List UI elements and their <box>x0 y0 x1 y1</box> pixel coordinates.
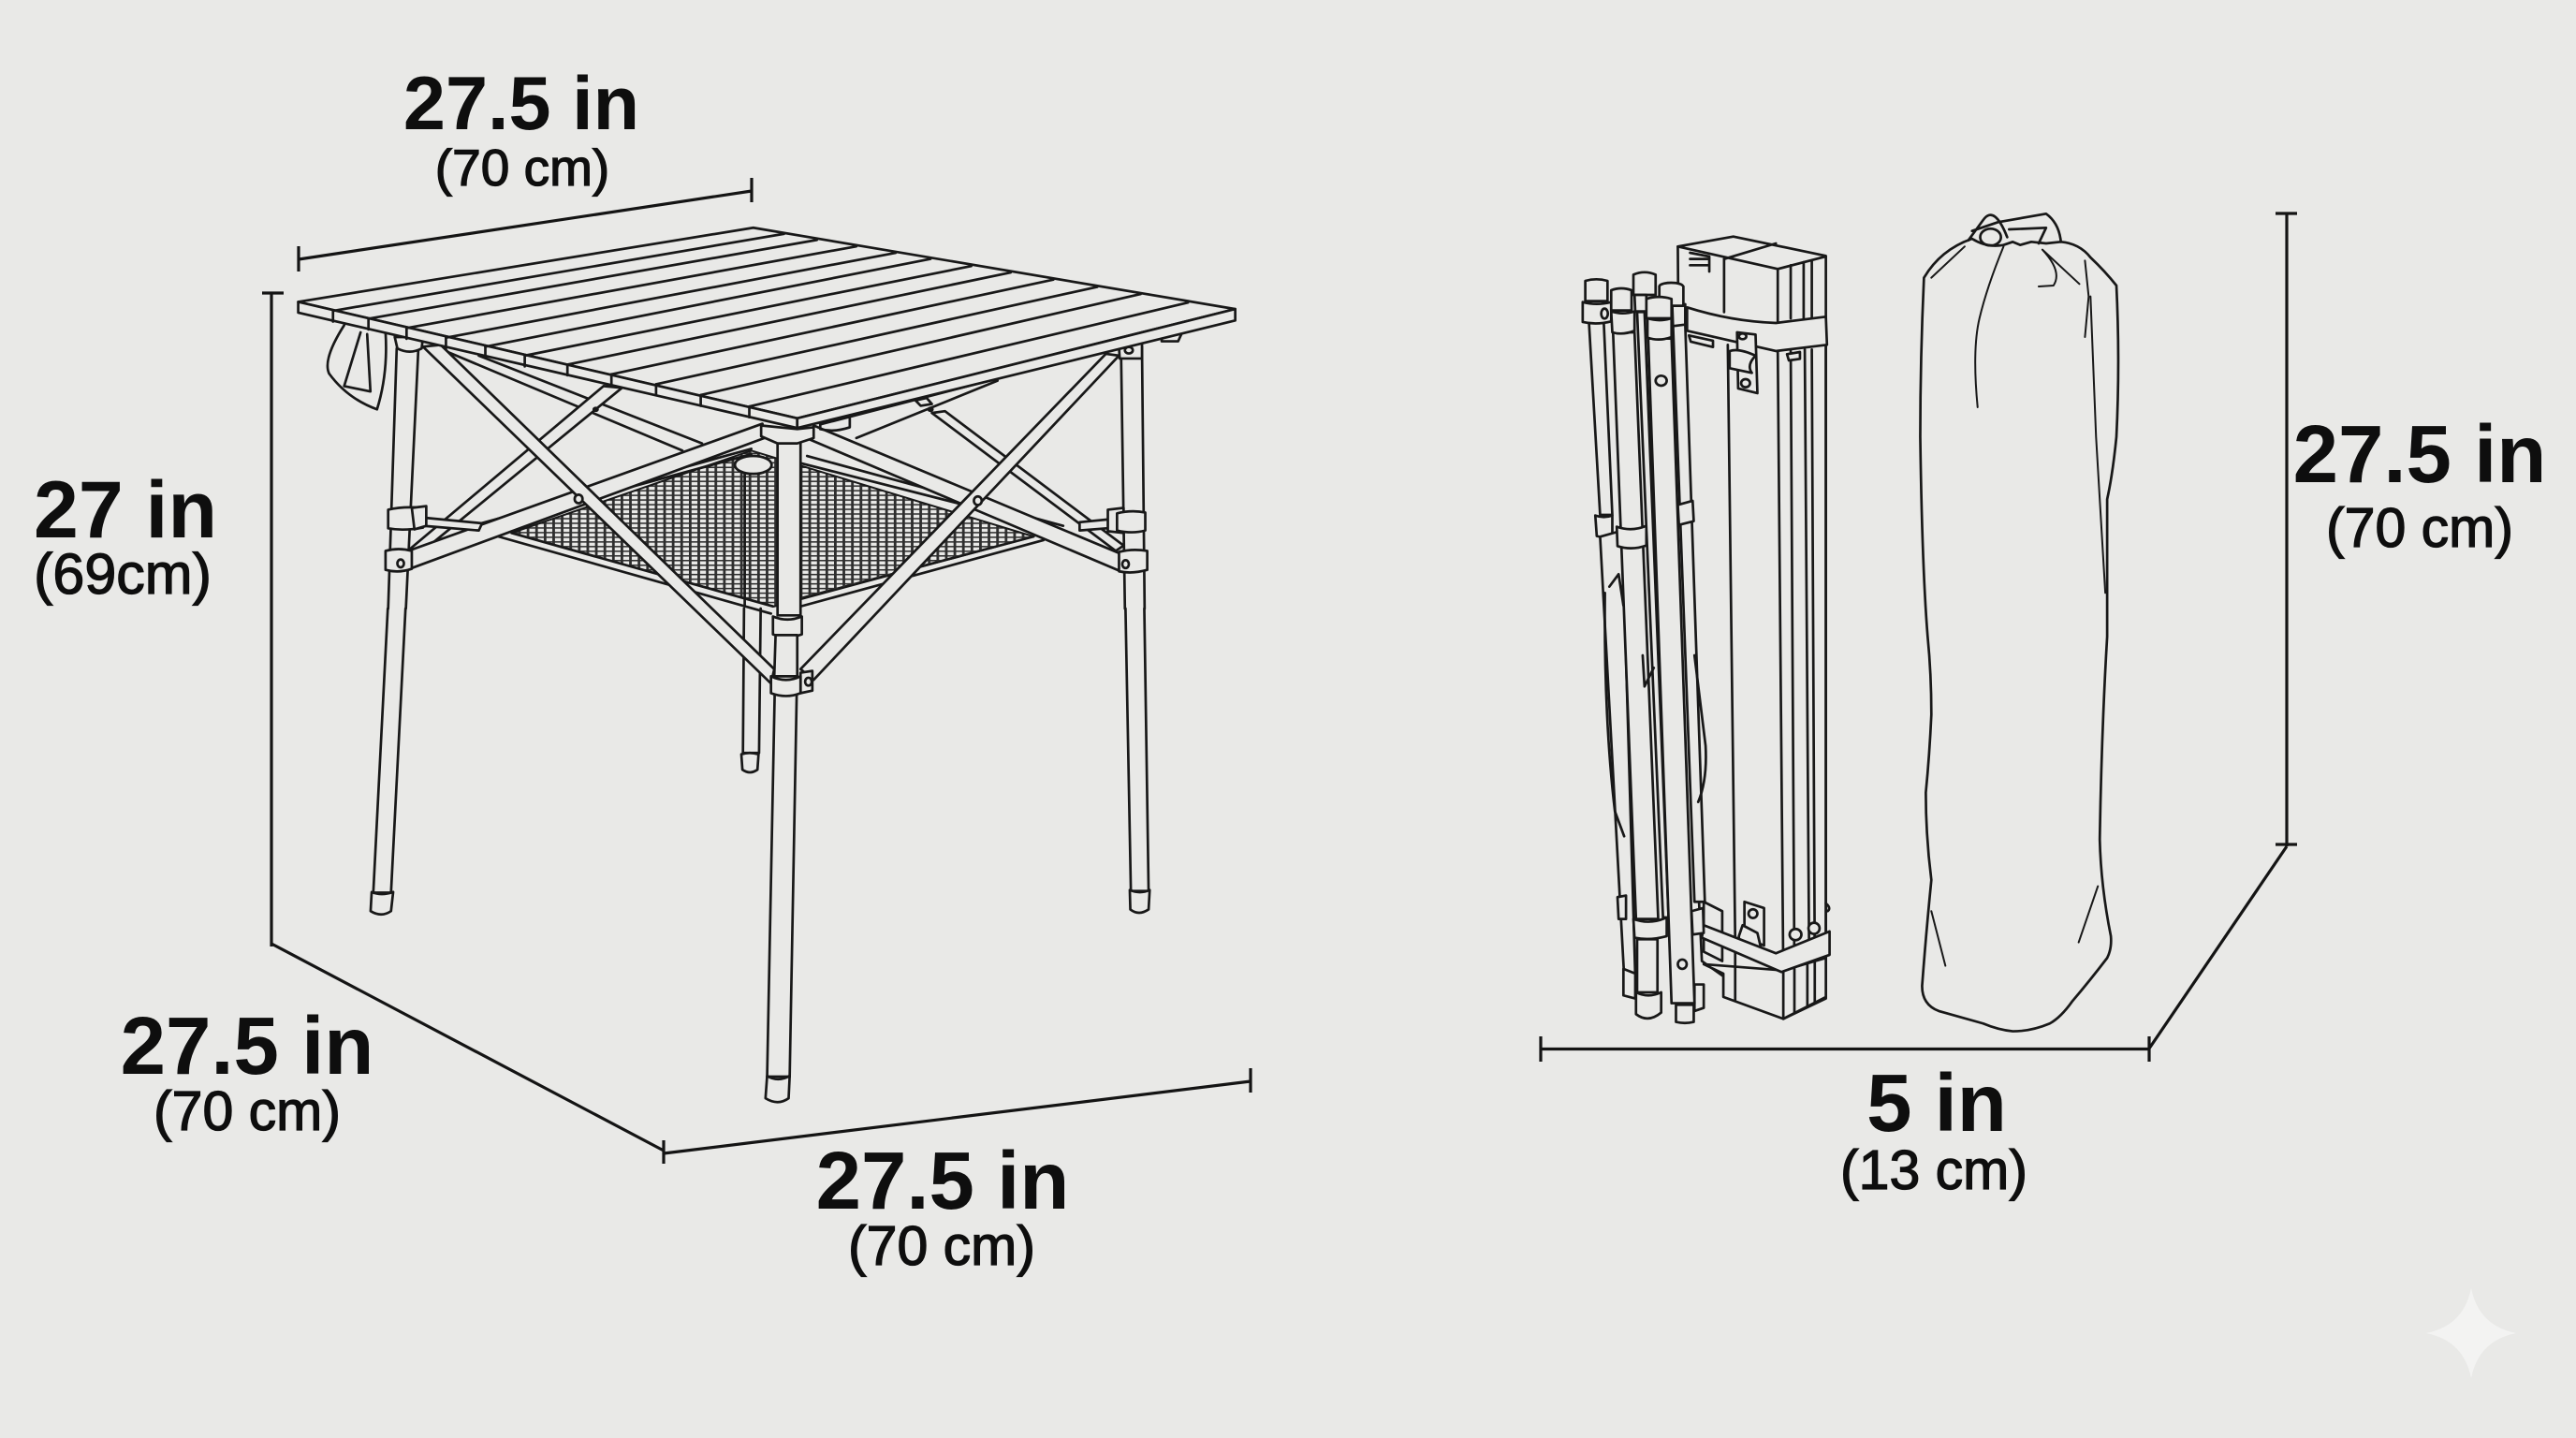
dimension: folded width <box>1541 1036 2149 1062</box>
label: folded height <box>2293 409 2546 559</box>
label: height: 27 in <box>34 465 217 555</box>
front leg upper <box>761 425 813 696</box>
bag drawstring <box>1969 213 2061 245</box>
label: top width <box>403 62 639 197</box>
label: left depth <box>121 1001 373 1142</box>
folded block body <box>1677 237 1826 1019</box>
folded table <box>1583 237 1830 1023</box>
mesh shelf <box>478 448 1063 613</box>
label: folded width: 5 in <box>1866 1058 2007 1149</box>
link arm left <box>423 518 482 531</box>
label: bottom depth: (70 cm) <box>848 1215 1035 1277</box>
under-table tabs <box>820 334 1181 431</box>
dimension: folded height <box>2276 213 2297 846</box>
strap cords <box>1604 574 1705 836</box>
upper band <box>1687 307 1827 351</box>
back leg <box>741 609 761 772</box>
table lower legs <box>371 609 1149 1102</box>
right collars <box>1108 508 1148 572</box>
bag folds <box>1931 246 2105 966</box>
label: folded height: 27.5 in <box>2293 409 2546 500</box>
dimension: top width <box>299 178 752 271</box>
label: folded height: (70 cm) <box>2326 497 2513 559</box>
label: top width: (70 cm) <box>435 139 609 197</box>
pole four <box>1647 297 1694 1023</box>
pivot pins <box>575 494 982 505</box>
label: left depth: 27.5 in <box>121 1001 373 1092</box>
left leg lower <box>371 609 405 915</box>
right leg lower <box>1125 609 1149 913</box>
rear struts <box>410 348 1123 550</box>
sparkle watermark <box>2426 1288 2516 1378</box>
table top <box>299 227 1236 428</box>
label: left depth: (70 cm) <box>154 1080 341 1142</box>
front leg lower <box>766 696 797 1102</box>
strut from front to left collar <box>403 424 765 569</box>
right leg upper <box>1119 343 1145 609</box>
label: height <box>34 465 217 606</box>
bag outline <box>1920 239 2118 1032</box>
link arm right <box>1079 519 1116 531</box>
dimension: depth bottom <box>664 1068 1251 1153</box>
carry bag <box>1920 213 2118 1032</box>
strap loop <box>328 325 386 409</box>
dimension: depth left <box>271 944 664 1164</box>
folding table <box>299 227 1236 696</box>
left collars <box>386 506 426 571</box>
strut from front to right collar <box>811 425 1122 570</box>
label: height: (69cm) <box>34 542 212 606</box>
rear pole <box>1660 283 1705 1011</box>
label: bottom depth <box>816 1136 1069 1277</box>
label: bottom depth: 27.5 in <box>816 1136 1069 1226</box>
lower band <box>1702 925 1830 972</box>
lower block <box>1704 902 1829 1019</box>
dimension: height <box>262 293 284 946</box>
label: top width: 27.5 in <box>403 62 639 146</box>
cross strut to front collar right <box>800 354 1119 680</box>
left leg upper <box>388 337 423 609</box>
pole one <box>1583 279 1635 999</box>
upper clip <box>1689 332 1800 393</box>
label: folded width: (13 cm) <box>1840 1139 2027 1201</box>
pole three <box>1633 272 1669 917</box>
dimension: folded diagonal <box>2149 846 2287 1049</box>
cross strut to front collar left <box>423 345 774 683</box>
pole two <box>1611 288 1667 1019</box>
label: folded width <box>1840 1058 2027 1201</box>
